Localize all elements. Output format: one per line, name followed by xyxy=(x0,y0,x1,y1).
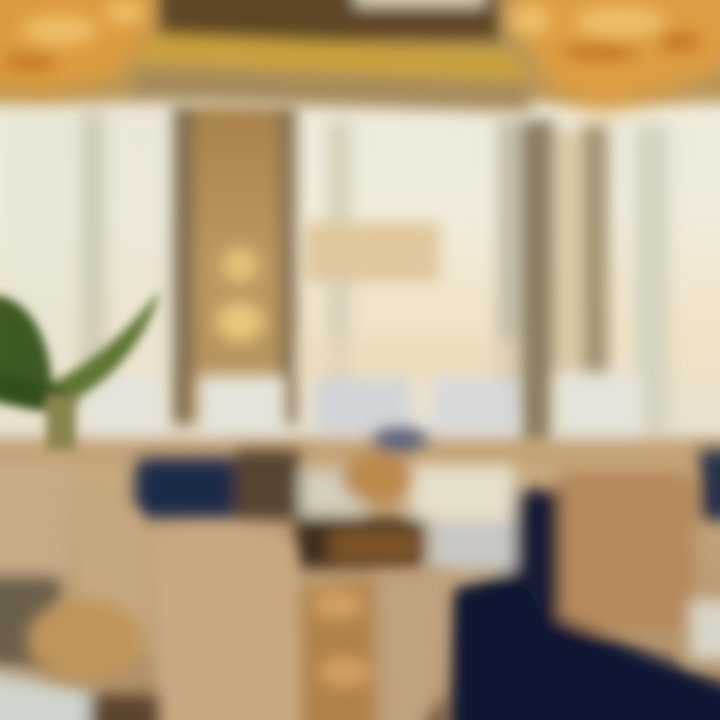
ceiling: bright recess panel xyxy=(355,0,485,6)
ceiling xyxy=(0,0,720,112)
sofa backs and lower windows xyxy=(0,372,720,720)
ceiling: gold band xyxy=(135,34,530,82)
ceiling: brown recess xyxy=(155,0,500,42)
sofa: navy bottom right xyxy=(450,570,720,720)
cushions: white row along the window xyxy=(85,372,640,447)
chair: back left xyxy=(70,500,150,650)
windows and pillars xyxy=(0,105,669,450)
chandelier: orange accents xyxy=(2,32,702,71)
chair: seat left xyxy=(27,598,143,682)
armchair: navy left xyxy=(135,458,240,518)
chair: main xyxy=(150,528,305,720)
armchair: brown shade xyxy=(235,450,300,520)
cushion: navy behind xyxy=(372,428,428,452)
window: left mullions xyxy=(0,110,167,400)
chandelier: left xyxy=(0,0,152,95)
armchair: navy right side xyxy=(515,490,560,615)
ceiling: upper dark coffer xyxy=(0,0,720,102)
plant: stem xyxy=(46,395,76,450)
plant xyxy=(0,290,160,450)
ceiling: shadow under band xyxy=(135,66,530,112)
dining chairs xyxy=(27,500,450,720)
chair: gold tufted centre xyxy=(300,580,378,720)
chair: right of centre xyxy=(370,570,450,720)
vase arrangement on table xyxy=(342,452,414,504)
chandeliers xyxy=(0,0,720,112)
table: dark base xyxy=(295,518,425,568)
chair: beige left side xyxy=(0,465,70,575)
floor: dark bottom xyxy=(90,695,440,720)
table: pale lower xyxy=(430,520,520,570)
pillar: right columns xyxy=(520,120,669,450)
chandelier: highlights xyxy=(2,0,702,71)
window: centre mullions xyxy=(300,120,516,420)
floor: dark left xyxy=(0,575,60,665)
floor: navy edge right xyxy=(700,450,720,520)
chandelier: right xyxy=(505,0,720,112)
furniture xyxy=(0,428,720,720)
chair: tufting highlights xyxy=(312,592,371,686)
wall sconces on left pillar xyxy=(216,247,264,342)
table: bright surface left xyxy=(295,470,365,515)
floor: warm lower room xyxy=(0,465,720,720)
floor: pale corner left xyxy=(0,670,90,720)
ledge: warm wood band xyxy=(0,438,720,470)
armchair: tan right xyxy=(555,470,695,630)
floor: pale corner right xyxy=(690,600,720,660)
pillar: left wood panel xyxy=(172,105,296,425)
table: bright surface right xyxy=(410,465,515,520)
